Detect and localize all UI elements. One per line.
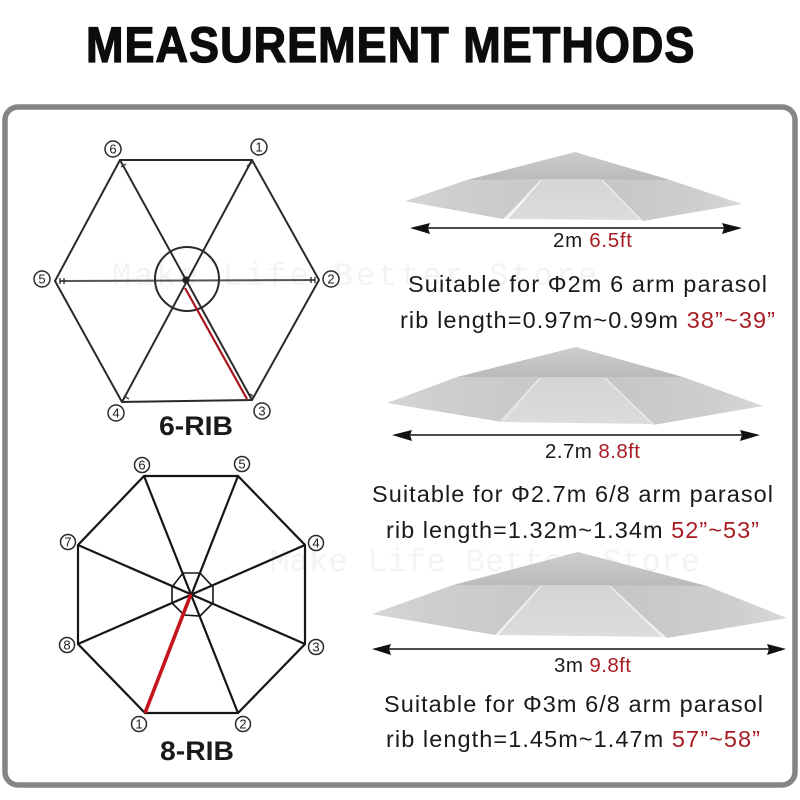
- rib number labels: 5: [238, 456, 246, 472]
- rib number labels: 1: [255, 140, 263, 154]
- dimension arrow: 2.7m: [392, 430, 760, 441]
- red rib line: [185, 288, 247, 399]
- diagram: 8-rib: [60, 456, 324, 766]
- parasol: 2.7m: [387, 347, 763, 425]
- rib number labels: 5: [38, 272, 46, 286]
- text: 2m parasol specification: Suitable for Φ2m 6 arm parasol: [408, 271, 767, 297]
- rib number labels: 2: [327, 272, 335, 286]
- rib number labels: 2: [239, 716, 247, 732]
- parasol: 3m: [372, 552, 787, 638]
- watermark: [112, 258, 700, 581]
- dimension label: 2.7m: 2.7m 8.8ft: [545, 440, 640, 463]
- text: 2m parasol specification: [400, 271, 775, 333]
- red rib line: [145, 594, 191, 713]
- rib number labels: 1: [135, 716, 143, 732]
- title: MEASUREMENT METHODS: [86, 18, 694, 74]
- parasol: 2m: [405, 152, 742, 221]
- rib number labels: 4: [312, 536, 320, 550]
- text: 3m parasol specification: Suitable for Φ3m 6/8 arm parasol: [384, 691, 763, 717]
- dimension arrow: 2m: [410, 223, 742, 234]
- text: 2.7m parasol specification: rib length=1.32m~1.34m 52”~53”: [386, 517, 759, 543]
- rib number labels: 4: [112, 406, 120, 420]
- watermark: Make Life Better Store: [270, 544, 700, 581]
- label: 6-RIB: 6-RIB: [159, 411, 233, 441]
- rib number labels: [34, 139, 339, 421]
- dimension label: 2m: 2m 6.5ft: [553, 229, 632, 252]
- dimension arrow: 3m: [372, 644, 786, 655]
- rib number labels: 7: [64, 534, 72, 550]
- dimension label: 3m: 3m 9.8ft: [554, 654, 631, 677]
- text: 3m parasol specification: rib length=1.45m~1.47m 57”~58”: [386, 726, 760, 752]
- rib number labels: [60, 456, 324, 732]
- text: 2m parasol specification: rib length=0.97m~0.99m 38”~39”: [400, 307, 775, 333]
- diagram: 6-rib: [34, 139, 339, 441]
- rib number labels: 3: [312, 640, 320, 654]
- label: 8-RIB: 8-RIB: [160, 736, 234, 766]
- text: 2.7m parasol specification: Suitable for Φ2.7m 6/8 arm parasol: [372, 481, 773, 507]
- rib number labels: 8: [63, 638, 71, 652]
- rib number labels: 3: [258, 404, 266, 418]
- text: 3m parasol specification: [384, 691, 763, 752]
- watermark: Make Life Better Store: [112, 258, 597, 295]
- rib number labels: 6: [138, 458, 146, 472]
- rib number labels: 6: [109, 142, 117, 156]
- text: 2.7m parasol specification: [372, 481, 773, 543]
